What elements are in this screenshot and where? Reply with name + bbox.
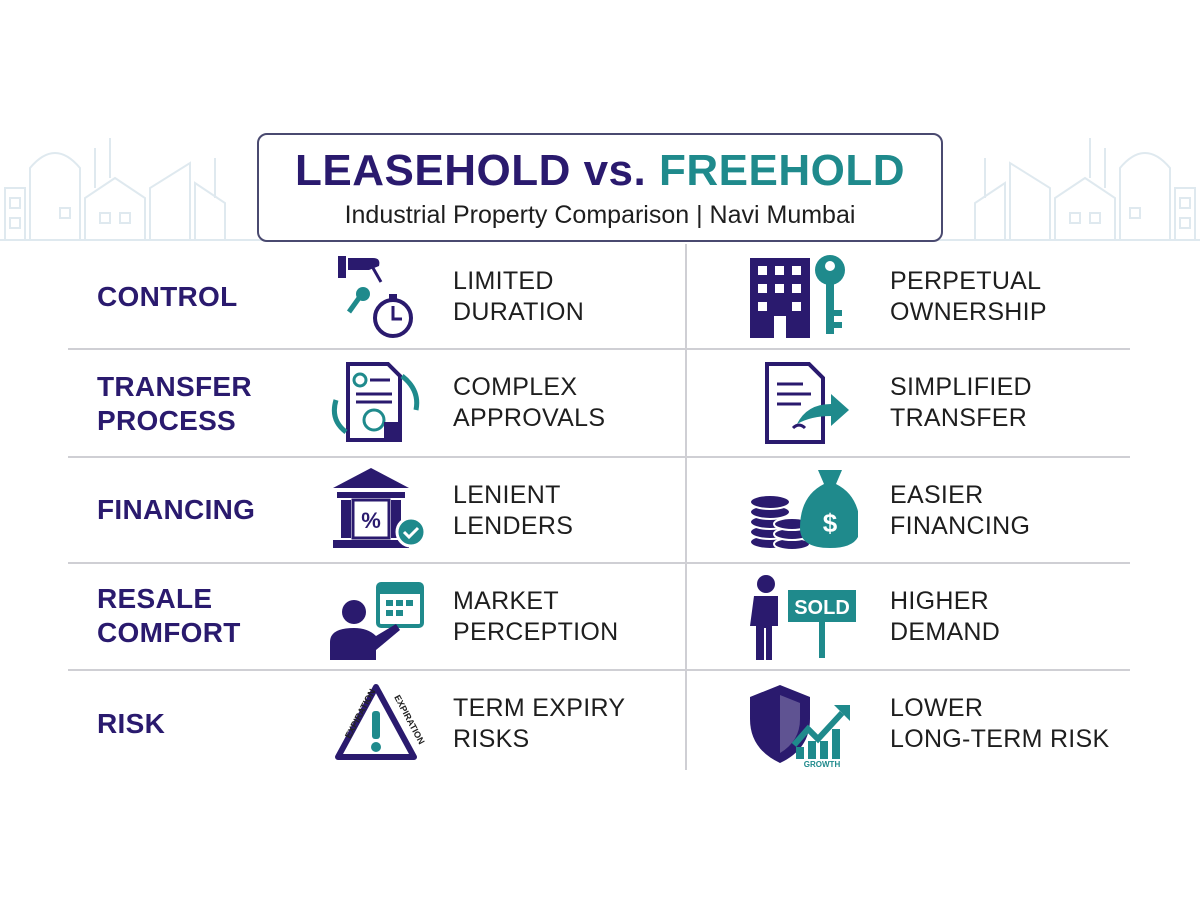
text: term expiry risks: RISKS — [453, 725, 530, 753]
icon: coins money bag — [751, 470, 858, 549]
icon: coins money bag: $ — [823, 508, 838, 538]
subtitle: Industrial Property Comparison | Navi Mumbai — [345, 201, 855, 229]
text: term expiry risks — [453, 694, 625, 753]
text: lower long-term risk: LONG-TERM RISK — [890, 725, 1110, 753]
label: resale comfort: COMFORT — [97, 617, 241, 648]
text: lenient lenders: LENIENT — [453, 481, 561, 509]
icon: person sold sign: SOLD — [794, 597, 850, 619]
row: risk — [97, 684, 1110, 767]
text: lenient lenders — [453, 481, 573, 540]
label: resale comfort — [97, 583, 241, 648]
icon: expiration warning: EXPIRATION — [392, 693, 427, 746]
row: transfer — [97, 362, 1032, 444]
text: limited duration: LIMITED — [453, 267, 554, 295]
skyline background — [0, 138, 1200, 241]
title: LEASEHOLD vs. FREEHOLD — [295, 146, 905, 195]
text: simplified transfer: SIMPLIFIED — [890, 373, 1032, 401]
text: lower long-term risk: LOWER — [890, 694, 983, 722]
icon: person calendar — [330, 582, 424, 660]
label: resale comfort: RESALE — [97, 583, 212, 614]
text: lenient lenders: LENDERS — [453, 512, 573, 540]
text: easier financing: FINANCING — [890, 512, 1030, 540]
text: limited duration — [453, 267, 584, 326]
row: control — [97, 255, 1047, 338]
text: term expiry risks: TERM EXPIRY — [453, 694, 625, 722]
icon: bank: % — [361, 508, 381, 533]
text: easier financing: EASIER — [890, 481, 984, 509]
row: resale — [97, 575, 1000, 660]
icon: person sold sign — [750, 575, 856, 660]
icon: document arrow — [765, 362, 849, 444]
text: perpetual ownership: PERPETUAL — [890, 267, 1041, 295]
label: risk: RISK — [97, 708, 165, 739]
row: financing — [97, 468, 1030, 549]
text: market perception: MARKET — [453, 587, 559, 615]
label: transfer process: TRANSFER — [97, 371, 252, 402]
text: perpetual ownership — [890, 267, 1047, 326]
icon: documents approval — [332, 362, 420, 442]
text: higher demand: HIGHER — [890, 587, 989, 615]
label: transfer process — [97, 371, 252, 436]
text: simplified transfer — [890, 373, 1032, 432]
text: market perception: PERCEPTION — [453, 618, 619, 646]
icon: bank — [333, 468, 424, 548]
text: simplified transfer: TRANSFER — [890, 404, 1027, 432]
text: complex approvals: APPROVALS — [453, 404, 605, 432]
text: higher demand: DEMAND — [890, 618, 1000, 646]
icon: building key — [750, 255, 845, 338]
icon: hand key clock — [338, 256, 413, 338]
label: transfer process: PROCESS — [97, 405, 236, 436]
text: easier financing — [890, 481, 1030, 540]
text: perpetual ownership: OWNERSHIP — [890, 298, 1047, 326]
text: higher demand — [890, 587, 1000, 646]
icon: expiration warning — [335, 684, 427, 760]
text: limited duration: DURATION — [453, 298, 584, 326]
icon: shield growth — [750, 685, 850, 767]
label: control: CONTROL — [97, 281, 238, 312]
icon: expiration warning: EXPIRATION — [343, 687, 377, 740]
vertical divider — [685, 244, 687, 770]
text: complex approvals: COMPLEX — [453, 373, 577, 401]
text: complex approvals — [453, 373, 605, 432]
title box — [257, 133, 943, 242]
text: lower long-term risk — [890, 694, 1110, 753]
text: market perception — [453, 587, 619, 646]
label: financing: FINANCING — [97, 494, 255, 525]
